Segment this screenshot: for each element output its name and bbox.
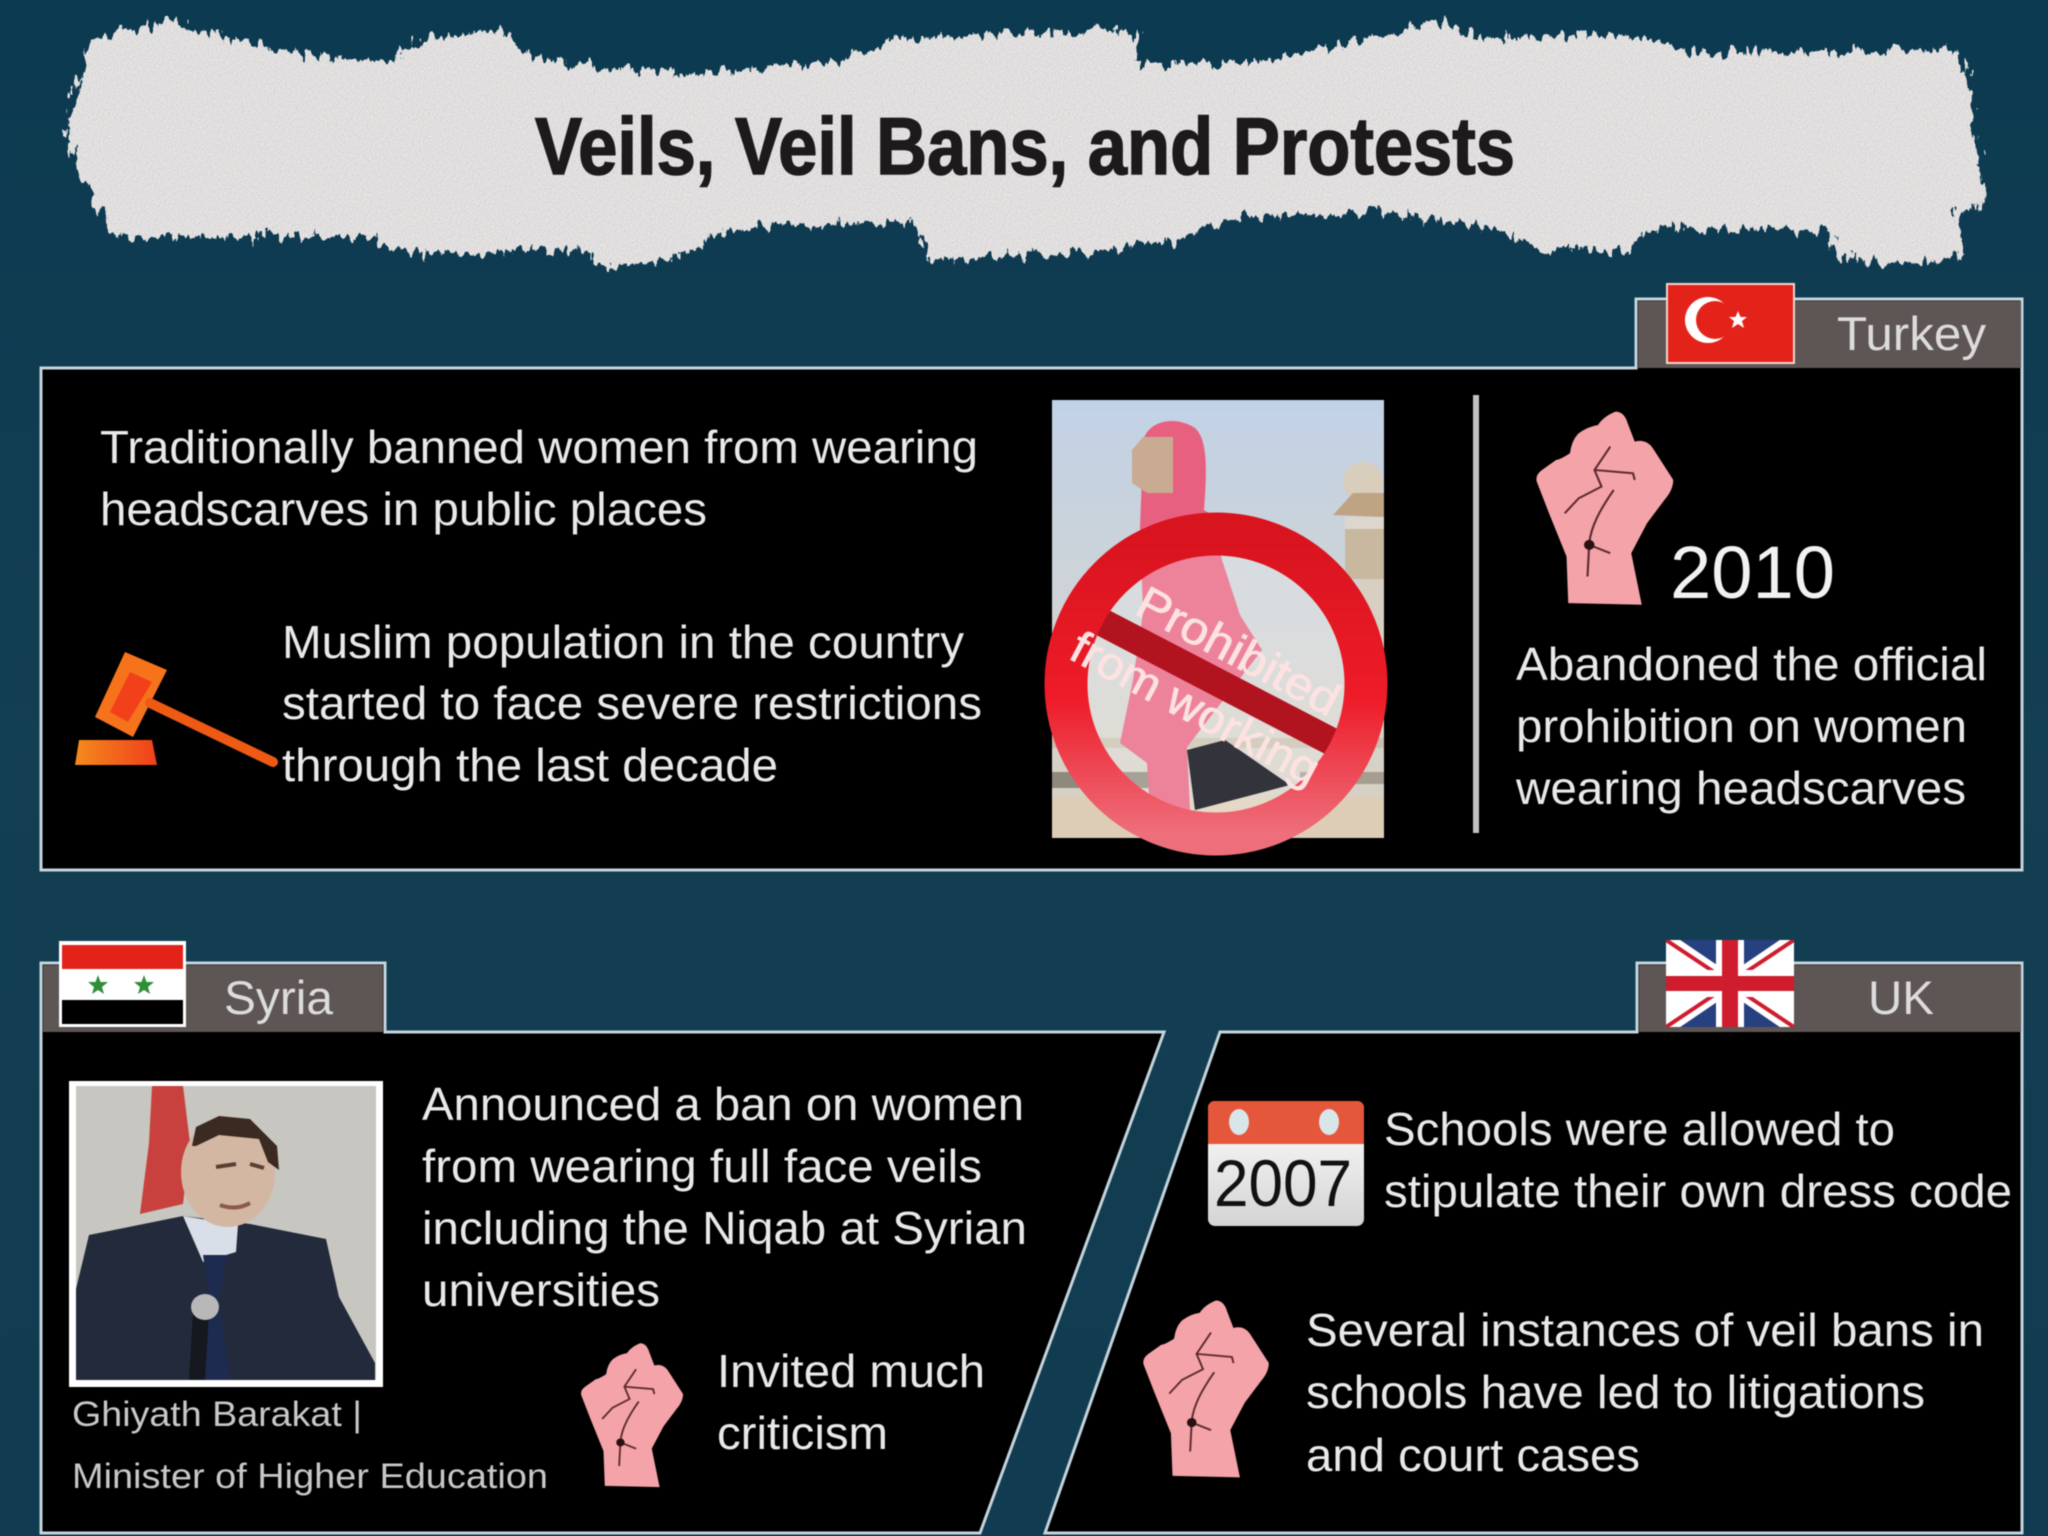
caption: Ghiyath Barakat | <box>72 1395 362 1434</box>
stamp text <box>1062 576 1349 795</box>
text: dress code <box>1384 1103 2012 1217</box>
text: criticism: Invited much <box>717 1345 985 1397</box>
text: traditional ban: Traditionally banned women from wearing <box>100 421 978 473</box>
tab label: UK <box>1868 971 1934 1024</box>
text: Muslim population: through the last decade <box>282 739 778 791</box>
panel: UK <box>1045 940 2022 1533</box>
flag: Turkey <box>1667 284 1794 363</box>
panel frame <box>41 299 2022 870</box>
text: abandoned prohibition: wearing headscarves <box>1515 762 1966 814</box>
tab: Syria <box>43 965 383 1032</box>
tab: UK <box>1639 965 2021 1032</box>
icon: calendar 2007: 2007 <box>1214 1146 1352 1220</box>
title banner <box>65 20 1985 270</box>
text: abandoned prohibition: Abandoned the official <box>1516 638 1987 690</box>
flag: Syria <box>59 941 186 1027</box>
tab label: Syria <box>224 971 334 1024</box>
stamp text: Prohibited <box>1128 576 1349 726</box>
divider <box>1473 395 1479 833</box>
text: traditional ban <box>100 421 978 535</box>
panel: Syria <box>41 941 1164 1533</box>
icon: prohibited sign <box>1062 534 1366 834</box>
panel frame <box>1045 963 2022 1533</box>
text: Muslim population: Muslim population in the country <box>282 616 964 668</box>
text: ban announcement: from wearing full face veils <box>422 1140 982 1192</box>
text: criticism <box>717 1345 985 1459</box>
icon: raised fist <box>581 1343 683 1487</box>
text: dress code: Schools were allowed to <box>1384 1103 1895 1155</box>
panel: Turkey <box>41 284 2022 870</box>
panel frame <box>41 963 1164 1533</box>
text: litigations <box>1306 1304 1984 1481</box>
text: Muslim population: started to face severe restrictions <box>282 677 982 729</box>
text: Muslim population <box>282 616 982 791</box>
text: ban announcement: universities <box>422 1264 660 1316</box>
text: ban announcement <box>422 1078 1027 1316</box>
text: ban announcement: Announced a ban on women <box>422 1078 1024 1130</box>
tower <box>1333 462 1384 646</box>
icon: gavel <box>75 652 273 765</box>
text: ban announcement: including the Niqab at Syrian <box>422 1202 1027 1254</box>
tab: Turkey <box>1638 301 2021 368</box>
woman <box>1120 421 1262 810</box>
text: criticism: criticism <box>717 1407 888 1459</box>
text: traditional ban: headscarves in public places <box>100 483 707 535</box>
photo: Ghiyath Barakat <box>69 1081 383 1387</box>
icon: raised fist <box>1143 1301 1269 1477</box>
caption <box>72 1395 548 1496</box>
text: litigations: schools have led to litigations <box>1306 1366 1925 1418</box>
text: litigations: Several instances of veil bans in <box>1306 1304 1984 1356</box>
title: Veils, Veil Bans, and Protests <box>535 102 1515 192</box>
text: litigations: and court cases <box>1306 1429 1640 1481</box>
railing and ground <box>1052 738 1384 838</box>
flag: UK <box>1666 940 1794 1027</box>
stamp text: from working <box>1062 621 1329 795</box>
2010: 2010 <box>1670 531 1835 614</box>
wash inside ring <box>1086 554 1346 814</box>
caption: Minister of Higher Education <box>72 1457 548 1496</box>
illustration: woman with briefcase <box>1052 400 1384 838</box>
icon: calendar 2007 <box>1208 1101 1364 1226</box>
torn paper brush strip <box>65 20 1985 270</box>
text: dress code: stipulate their own dress code <box>1384 1165 2012 1217</box>
icon: raised fist <box>1536 412 1673 605</box>
briefcase <box>1187 740 1290 810</box>
text: abandoned prohibition <box>1515 638 1987 814</box>
tab label: Turkey <box>1837 307 1987 360</box>
text: abandoned prohibition: prohibition on women <box>1516 700 1967 752</box>
